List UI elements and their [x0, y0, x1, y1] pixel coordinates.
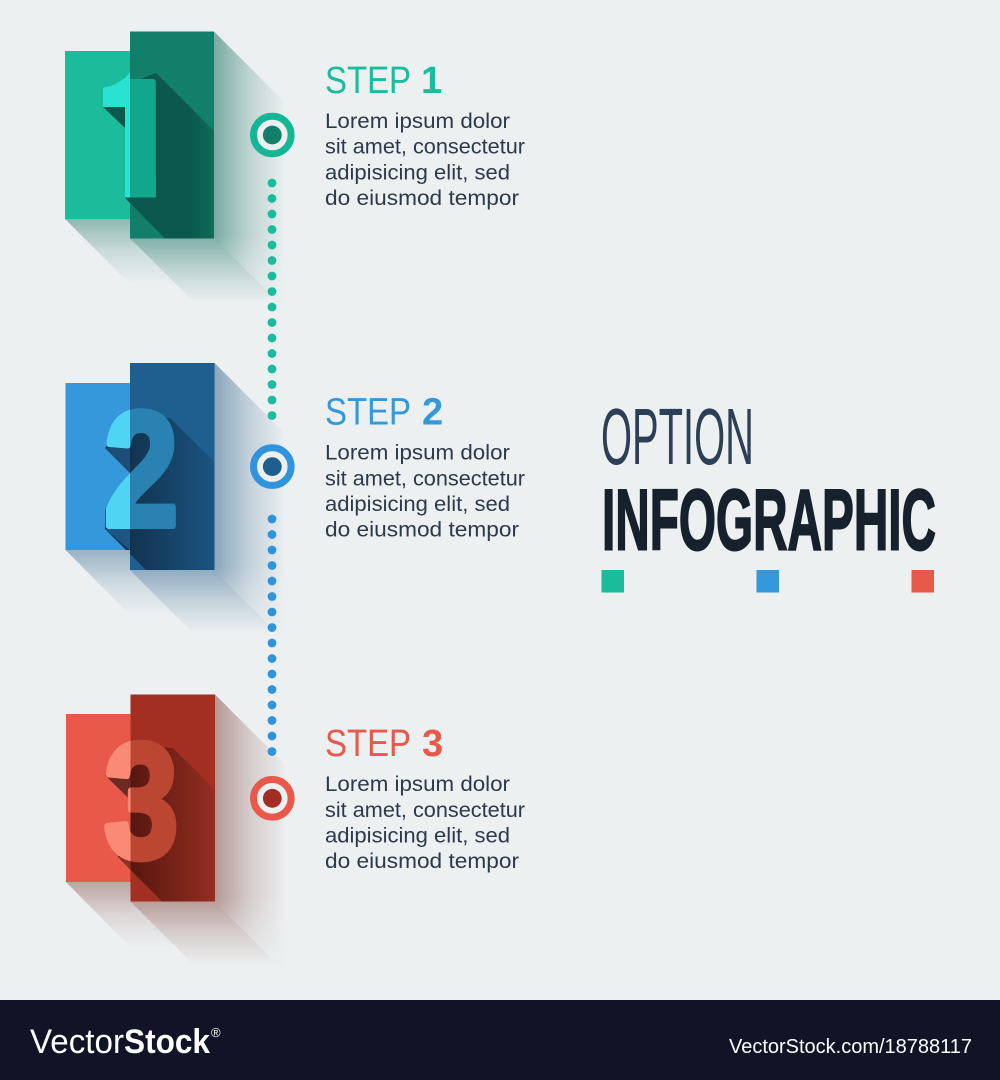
numeral 2: 2 [104, 378, 178, 560]
long shadow of step 2 block [66, 363, 286, 642]
step 3 text [325, 773, 525, 873]
numeral 3 shadow [105, 745, 215, 902]
text: OPTION [601, 392, 754, 481]
step 1 text: adipisicing elit, sed [325, 161, 510, 184]
numeral 1 shadow [103, 73, 214, 238]
footer logo: Vector [30, 1023, 124, 1061]
numeral 1 [103, 72, 156, 198]
step 1 text [325, 110, 525, 210]
timeline marker 1 [253, 116, 291, 154]
step 2 text: adipisicing elit, sed [325, 493, 510, 516]
step 3 text: sit amet, consectetur [325, 799, 525, 822]
footer url: VectorStock.com/18788117 [729, 1036, 972, 1058]
legend squares [602, 570, 934, 592]
light blue rectangle [66, 383, 130, 550]
numeral 1: 1 [82, 46, 188, 230]
dotted connector: blue [268, 515, 276, 756]
numeral 3 [104, 740, 176, 862]
step 2 text: Lorem ipsum dolor [325, 442, 510, 465]
light green rectangle [65, 51, 130, 219]
step 1 text: do eiusmod tempor [325, 187, 519, 210]
step 1 heading: 1 [421, 60, 442, 102]
footer logo: Stock [124, 1023, 210, 1061]
step 3 heading: STEP [325, 723, 411, 765]
numeral 3: 3 [104, 709, 178, 892]
footer bar [0, 1000, 1000, 1080]
step 2 heading: 2 [422, 392, 443, 434]
step 3 heading: 3 [422, 723, 443, 765]
step 1 text: Lorem ipsum dolor [325, 110, 510, 133]
numeral 3: 3 [104, 709, 178, 892]
dark green rectangle [130, 32, 214, 238]
numeral 1: 1 [82, 46, 188, 230]
timeline marker 3 [253, 780, 291, 817]
step 2 text: sit amet, consectetur [325, 467, 525, 490]
numeral 2: 2 [104, 378, 178, 560]
step 3 text: do eiusmod tempor [325, 850, 519, 873]
step 1 heading: STEP [325, 60, 411, 102]
timeline marker 2 [253, 448, 291, 485]
footer logo: ® [211, 1025, 221, 1040]
dark blue rectangle [130, 363, 214, 570]
panel: step 3 block [66, 694, 287, 974]
dark red rectangle [130, 694, 215, 902]
long shadow of step 1 block [65, 32, 286, 310]
long shadow of step 3 block [66, 694, 287, 974]
step 3 text: adipisicing elit, sed [325, 824, 510, 848]
step 2 text: do eiusmod tempor [325, 519, 519, 542]
step 2 text [325, 442, 525, 542]
footer logo [30, 1023, 221, 1061]
panel: step 1 block [65, 32, 286, 310]
step 1 text: sit amet, consectetur [325, 136, 525, 159]
numeral 2 [106, 408, 176, 529]
step 2 heading: STEP [325, 392, 411, 434]
step 3 text: Lorem ipsum dolor [325, 773, 510, 796]
numeral 2 shadow [105, 418, 214, 570]
light red rectangle [66, 714, 130, 882]
panel: step 2 block [66, 363, 286, 642]
dotted connector: green [268, 179, 276, 420]
